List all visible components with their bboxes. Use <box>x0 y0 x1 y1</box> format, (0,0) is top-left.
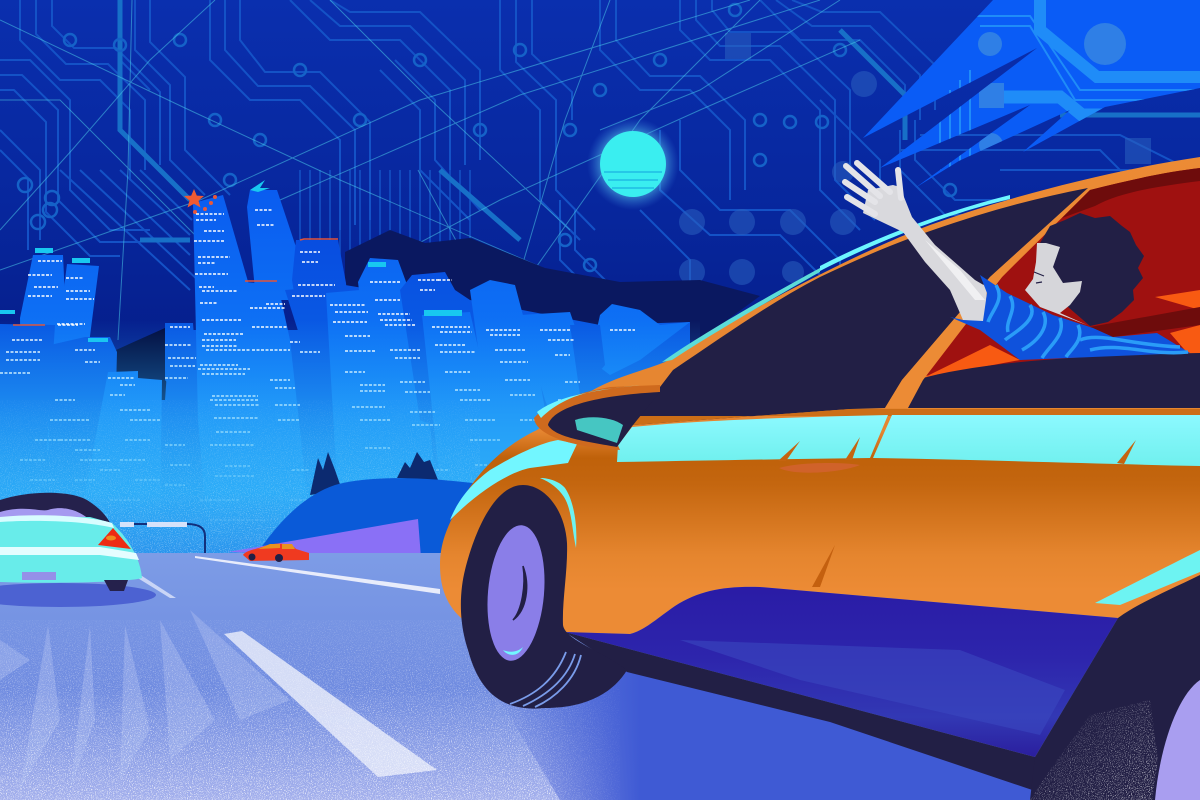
bright blue wedge of circuit light <box>863 0 1200 188</box>
distant mountains <box>116 230 760 400</box>
body nicks <box>778 437 1136 464</box>
main orange car <box>440 157 1200 800</box>
car ahead, rear view <box>0 493 156 607</box>
central star tower and neighbours <box>165 190 690 540</box>
hair <box>1040 213 1144 326</box>
rear wheel road grain <box>1030 700 1158 800</box>
striped sleeve <box>950 275 1190 360</box>
arm and hand <box>845 163 987 322</box>
ground haze over the buildings <box>0 320 700 560</box>
moon <box>587 118 679 210</box>
city backing mass <box>0 300 690 560</box>
rooftop accents <box>0 180 462 342</box>
side glass reflection <box>617 415 888 462</box>
door pillar <box>885 188 1088 408</box>
lower door interior <box>905 353 1200 408</box>
dark sill <box>565 632 1070 800</box>
underside panel <box>565 587 1118 757</box>
left tower cluster <box>0 255 162 520</box>
rear interior, red <box>923 168 1200 376</box>
front wheel <box>461 485 627 709</box>
lit windows <box>0 210 635 520</box>
street light <box>120 522 205 553</box>
night sky background <box>0 0 1200 600</box>
haze grain <box>0 400 480 560</box>
thin constellation lines <box>0 0 860 340</box>
road grain <box>0 620 620 800</box>
face <box>1025 243 1087 325</box>
road <box>0 553 1200 800</box>
small red car in the distance <box>243 544 309 562</box>
rear sill cyan stripe <box>1095 550 1200 605</box>
road speed streaks <box>0 610 290 790</box>
city skyline <box>0 180 700 560</box>
underside reflection <box>680 640 1065 735</box>
foreground car shadow on road <box>500 665 1100 800</box>
road centre dashes <box>195 556 440 594</box>
wing mirror <box>534 385 660 450</box>
side window, dark <box>610 188 1088 425</box>
fender highlight <box>450 440 577 520</box>
rear wheel rim <box>1155 680 1200 800</box>
door trim <box>633 409 1200 425</box>
car body <box>440 157 1200 634</box>
boy leaning out of the window <box>845 163 1190 360</box>
hill with trees <box>228 452 480 560</box>
rear wheel arch <box>1030 575 1200 800</box>
cyan roof highlight <box>820 195 1010 271</box>
circuit board traces <box>0 0 1200 295</box>
red star <box>184 189 204 208</box>
circuit chips <box>679 33 1151 285</box>
